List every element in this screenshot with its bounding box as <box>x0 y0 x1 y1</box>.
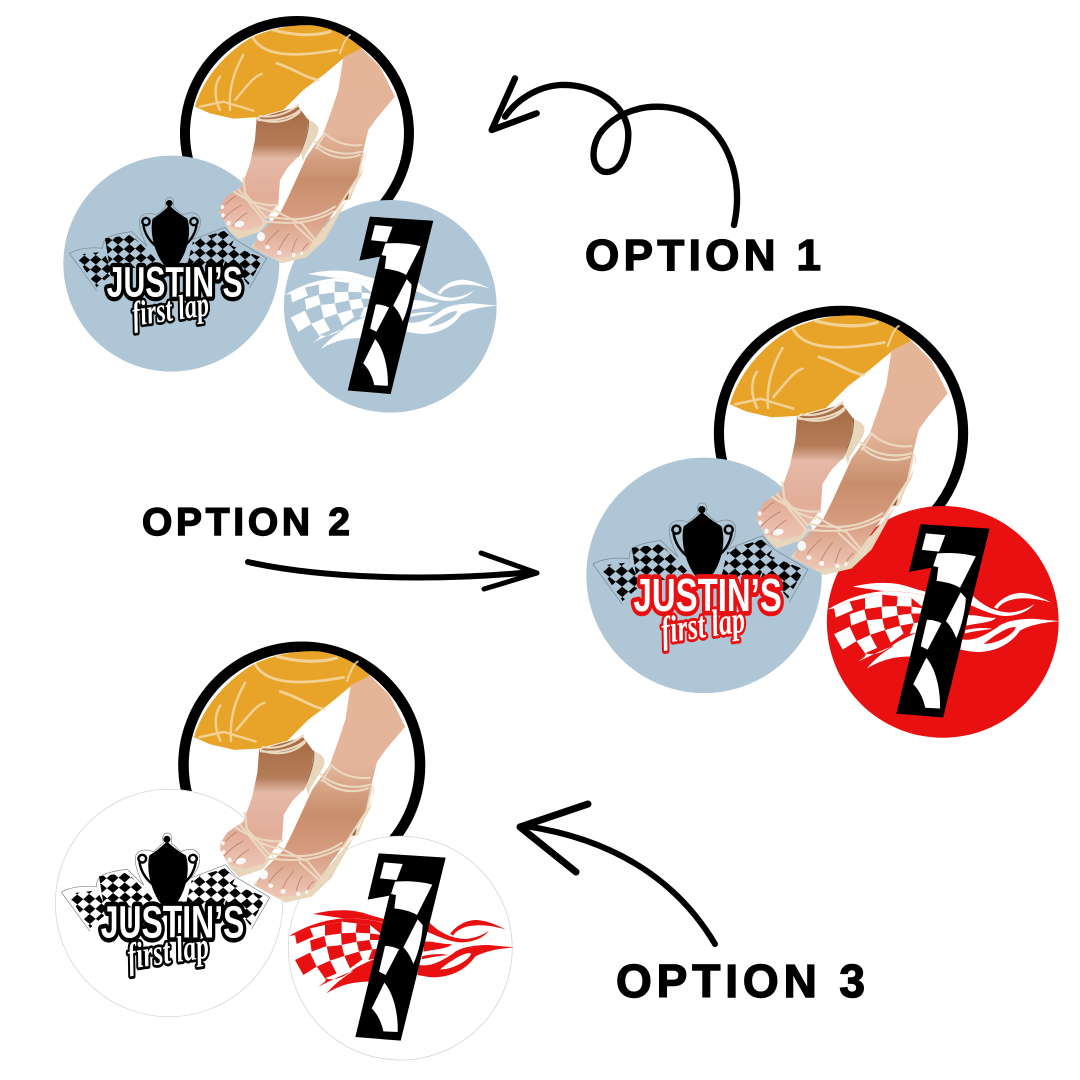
option 1 arrow <box>492 78 737 225</box>
option 2 composition <box>586 311 1060 738</box>
option 1 logo: Justin's first lap: first lap <box>129 285 211 334</box>
option 3 label: OPTION 3 <box>616 955 865 1007</box>
option 2 ring <box>719 311 963 555</box>
option 1 left coaster: blue <box>63 156 279 372</box>
option 1 photo: feet in sandals <box>195 25 395 263</box>
option 3 logo: Justin's first lap: first lap <box>125 925 211 977</box>
option 3 ring <box>183 647 420 883</box>
option 1 logo: Justin's first lap <box>69 197 267 334</box>
option 3 photo: feet in sandals <box>194 651 405 903</box>
option 3 logo: Justin's first lap: JUSTIN’S <box>101 897 244 948</box>
option 2 logo: Justin's first lap, red outline <box>593 503 808 652</box>
option 1 composition <box>63 21 498 413</box>
option 2 photo: feet in sandals <box>730 315 948 575</box>
option 1 ring <box>185 21 409 245</box>
option 1 label: OPTION 1 <box>585 231 821 280</box>
option 3 left coaster: white <box>55 789 283 1017</box>
option 2 left coaster: blue <box>586 458 822 693</box>
option 1 logo: Justin's first lap: JUSTIN’S <box>107 258 243 306</box>
option 2 right coaster: red with white flame <box>827 506 1060 738</box>
option 3 composition <box>55 647 514 1060</box>
option 2 label: OPTION 2 <box>142 501 350 544</box>
option 1 right coaster: blue with white flame <box>284 200 498 413</box>
option 3 right coaster: white with red flame <box>288 836 514 1060</box>
option 3 logo: Justin's first lap <box>61 833 270 977</box>
option 2 logo: Justin's first lap, red outline: first lap <box>658 599 748 652</box>
option 2 logo: Justin's first lap, red outline: JUSTIN’S <box>634 569 782 621</box>
option 2 arrow <box>248 553 537 589</box>
option 3 arrow <box>520 804 715 944</box>
